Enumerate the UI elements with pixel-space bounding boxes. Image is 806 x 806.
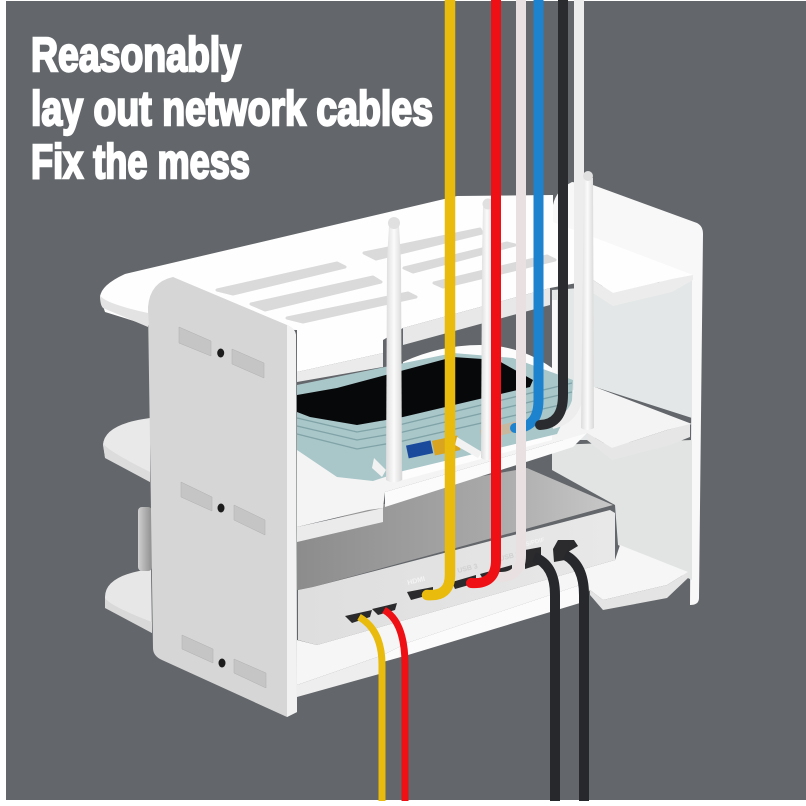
black cable right: [565, 555, 584, 801]
antennas: [386, 171, 594, 482]
front left panel: [148, 277, 297, 717]
bottom shelf: [297, 545, 688, 697]
top shelf slots: [217, 229, 555, 322]
silver device side: [138, 507, 152, 571]
device port labels: USB 3: [499, 551, 521, 563]
black cable left: [534, 557, 555, 801]
device port labels: USB 3: [457, 563, 479, 575]
left shelf ends: [103, 418, 152, 633]
device port labels: S/PDIF: [525, 537, 546, 548]
yellow cable: [427, 0, 450, 595]
thin red cable: [384, 610, 405, 801]
white cable: [552, 0, 579, 424]
router ports: [406, 440, 433, 458]
red cable: [471, 0, 496, 583]
top shelf: [100, 195, 693, 382]
device ports: [345, 540, 578, 623]
title line 3: Fix the mess: [31, 136, 250, 189]
cables going down: [359, 555, 584, 801]
silver device: [297, 468, 615, 645]
black cable: [540, 0, 563, 425]
title: [31, 29, 433, 189]
right side panel: [552, 182, 703, 605]
router: [297, 345, 573, 481]
network cables from above: [427, 0, 563, 595]
device port labels: [407, 537, 546, 587]
screws: [217, 348, 226, 668]
title line 1: Reasonably: [31, 29, 241, 82]
title line 2: lay out network cables: [31, 83, 433, 136]
middle shelf: [297, 387, 692, 542]
blue cable: [515, 0, 538, 428]
thin yellow cable: [359, 617, 382, 801]
device port labels: HDMI: [407, 576, 426, 587]
mounting slots: [179, 327, 266, 688]
pale cable: [499, 0, 521, 577]
